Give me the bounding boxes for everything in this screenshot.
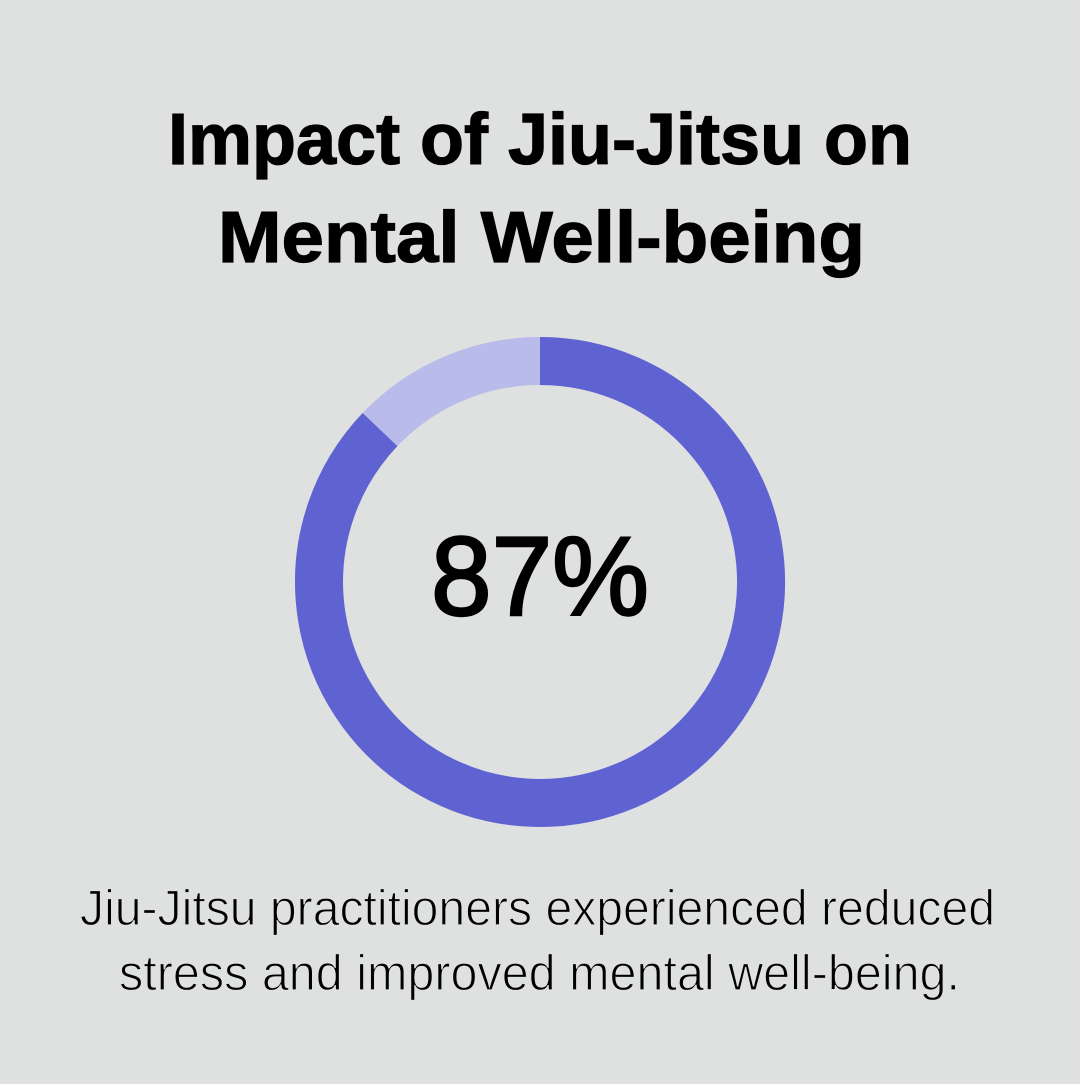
title: Impact of Jiu-Jitsu on — [168, 100, 912, 180]
donut remainder segment — [319, 361, 761, 803]
title: Mental Well-being — [218, 198, 865, 278]
donut chart: 87% — [319, 361, 761, 803]
description text: stress and improved mental well-being. — [119, 945, 960, 1001]
donut value label: 87% — [431, 514, 649, 639]
description text: Jiu-Jitsu practitioners experienced reduced — [80, 880, 995, 936]
description text — [80, 880, 995, 1001]
title — [168, 100, 912, 278]
donut value segment — [319, 361, 761, 803]
